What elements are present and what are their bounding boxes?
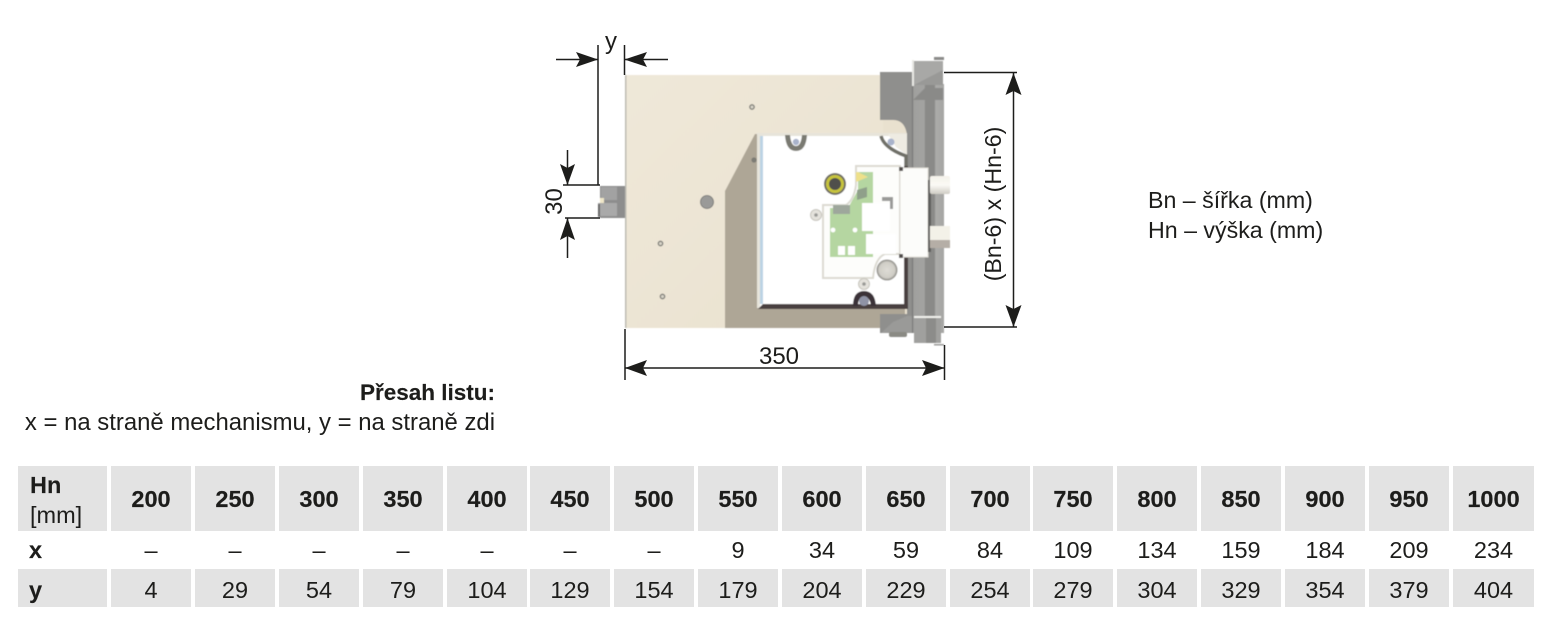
table header row: 650: [886, 486, 926, 512]
table header row: 500: [634, 486, 674, 512]
table row: y: 229: [886, 577, 926, 603]
table row: y: y: [29, 577, 42, 603]
electronics tray and circuit board: [810, 166, 900, 290]
table header row: 800: [1137, 486, 1177, 512]
table header row: [18, 466, 1534, 531]
round button: [876, 260, 898, 280]
table row: x: 109: [1053, 537, 1093, 563]
table row: x: 184: [1305, 537, 1345, 563]
table row: y: 404: [1474, 577, 1513, 603]
table row: x: 34: [809, 537, 835, 563]
dimension: 350: 350: [759, 343, 799, 370]
legend: Bn and Hn: Hn – výška (mm): [1148, 217, 1323, 243]
table row: y: 329: [1221, 577, 1261, 603]
wall bracket: [598, 186, 625, 218]
table header row: 450: [550, 486, 590, 512]
table row: x: –: [563, 537, 577, 563]
table row: y: 29: [222, 577, 248, 603]
metal frame: [912, 57, 944, 346]
white housing: [757, 133, 908, 309]
table header row: 600: [802, 486, 842, 512]
table row: y: 254: [970, 577, 1010, 603]
table row: y: 354: [1305, 577, 1345, 603]
table row: y: 279: [1053, 577, 1093, 603]
yellow adjustment screw: [824, 173, 846, 195]
legend: Bn and Hn: Bn – šířka (mm): [1148, 187, 1313, 213]
dimension: 30: 30: [541, 188, 568, 215]
table header row: 950: [1389, 486, 1429, 512]
table row: y: 379: [1389, 577, 1429, 603]
table row: y: 54: [306, 577, 332, 603]
text block: x and y explanation: x = na straně mechanismu, y = na straně zdi: [25, 409, 495, 436]
table row: y: 129: [550, 577, 590, 603]
table row: x: –: [396, 537, 410, 563]
legend: Bn and Hn: [1148, 187, 1323, 243]
cable glands: [930, 176, 950, 248]
table row: x: [29, 537, 1513, 563]
table row: y: 79: [390, 577, 416, 603]
table header row: 550: [718, 486, 758, 512]
table row: x: 59: [893, 537, 919, 563]
table header row: [mm]: [30, 502, 82, 528]
table header row: 350: [383, 486, 423, 512]
table header row: 700: [970, 486, 1010, 512]
table header row: 250: [215, 486, 255, 512]
table row: y: 4: [144, 577, 158, 603]
table header row: 400: [467, 486, 507, 512]
table row: x: 134: [1137, 537, 1177, 563]
table row: x: –: [312, 537, 326, 563]
table row: x: –: [480, 537, 494, 563]
table row: x: 9: [731, 537, 745, 563]
table row: y: 179: [718, 577, 758, 603]
table row: y: 204: [802, 577, 842, 603]
dimension: (Bn-6) x (Hn-6): [944, 72, 1022, 327]
table header row: 900: [1305, 486, 1345, 512]
beige base plate: [625, 75, 907, 328]
table: sash overlap values: [18, 466, 1534, 607]
table header row: 200: [131, 486, 171, 512]
dimension: y: [556, 28, 668, 185]
table row: x: 234: [1474, 537, 1513, 563]
table header row: 750: [1053, 486, 1093, 512]
dimension: y: y: [605, 28, 617, 55]
technical drawing: mechanism top view: [598, 57, 950, 346]
heading: Přesah listu: Přesah listu:: [360, 380, 495, 405]
table row: x: –: [228, 537, 242, 563]
table row: y: 304: [1137, 577, 1177, 603]
table header row: 300: [299, 486, 339, 512]
grey side block: [880, 72, 912, 337]
table row: x: 84: [977, 537, 1003, 563]
table header row: 850: [1221, 486, 1261, 512]
white connector block: [899, 167, 931, 258]
table header row: Hn: [30, 472, 61, 498]
table row: x: x: [29, 537, 42, 563]
table row: y: 104: [467, 577, 507, 603]
table header row: 1000: [1467, 486, 1520, 512]
dimension: (Bn-6) x (Hn-6): (Bn-6) x (Hn-6): [980, 127, 1006, 281]
table row: x: 209: [1389, 537, 1429, 563]
table row: x: –: [647, 537, 661, 563]
table row: y: [18, 569, 1534, 607]
table row: x: –: [144, 537, 158, 563]
table row: y: 154: [634, 577, 674, 603]
dimension: 30: [541, 150, 600, 258]
table row: x: 159: [1221, 537, 1261, 563]
dimension: 350: [625, 329, 944, 380]
